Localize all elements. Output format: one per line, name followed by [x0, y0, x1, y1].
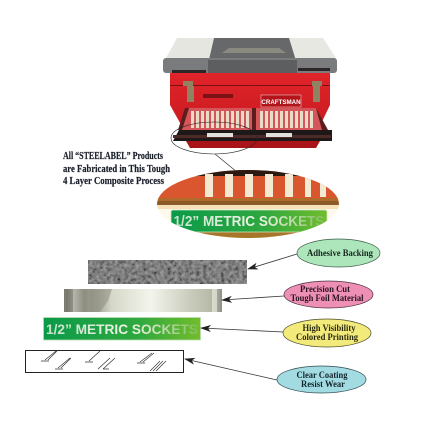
arrow: foil	[222, 296, 284, 300]
arrow: printing	[201, 328, 283, 332]
toolbox lid	[163, 38, 337, 73]
arrow: adhesive	[248, 254, 297, 269]
heading text: 4 Layer Composite Process	[63, 175, 165, 187]
label: foil material	[284, 281, 373, 308]
label: foil material: Tough Foil Material	[290, 294, 364, 304]
label: adhesive backing	[297, 239, 380, 267]
callout circle with leader line	[171, 122, 257, 172]
label: clear coating: Resist Wear	[301, 380, 346, 390]
label: clear coating: Clear Coating	[296, 371, 348, 381]
label: colored printing	[283, 319, 371, 347]
heading text: are Fabricated in This Tough	[63, 163, 170, 175]
magnified green label: 1/2” METRIC SOCKETS	[174, 214, 325, 230]
label: colored printing: High Visibility	[302, 324, 356, 334]
toolbox latches	[183, 81, 322, 102]
magnified green label	[171, 210, 327, 232]
layer: clear coating	[26, 350, 184, 372]
magnified sockets	[205, 174, 326, 197]
open drawer with sockets	[173, 108, 332, 148]
layer: foil	[64, 289, 222, 312]
heading text: All “STEELABEL” Products	[63, 150, 164, 162]
badge: CRAFTSMAN: CRAFTSMAN	[261, 99, 301, 106]
toolbox red body	[170, 73, 330, 130]
arrow: coating	[185, 359, 277, 380]
badge: CRAFTSMAN	[261, 95, 301, 107]
layer: adhesive backing	[88, 260, 247, 284]
magnified oval detail	[157, 170, 339, 238]
label: foil material: Precision Cut	[300, 285, 351, 295]
label: colored printing: Colored Printing	[296, 333, 358, 343]
label: clear coating	[277, 366, 366, 393]
label: adhesive backing: Adhesive Backing	[307, 249, 373, 259]
toolbox photo	[163, 38, 337, 148]
layer: printed label	[44, 318, 200, 340]
layer: printed label: 1/2” METRIC SOCKETS	[46, 321, 198, 337]
heading text	[63, 150, 170, 187]
